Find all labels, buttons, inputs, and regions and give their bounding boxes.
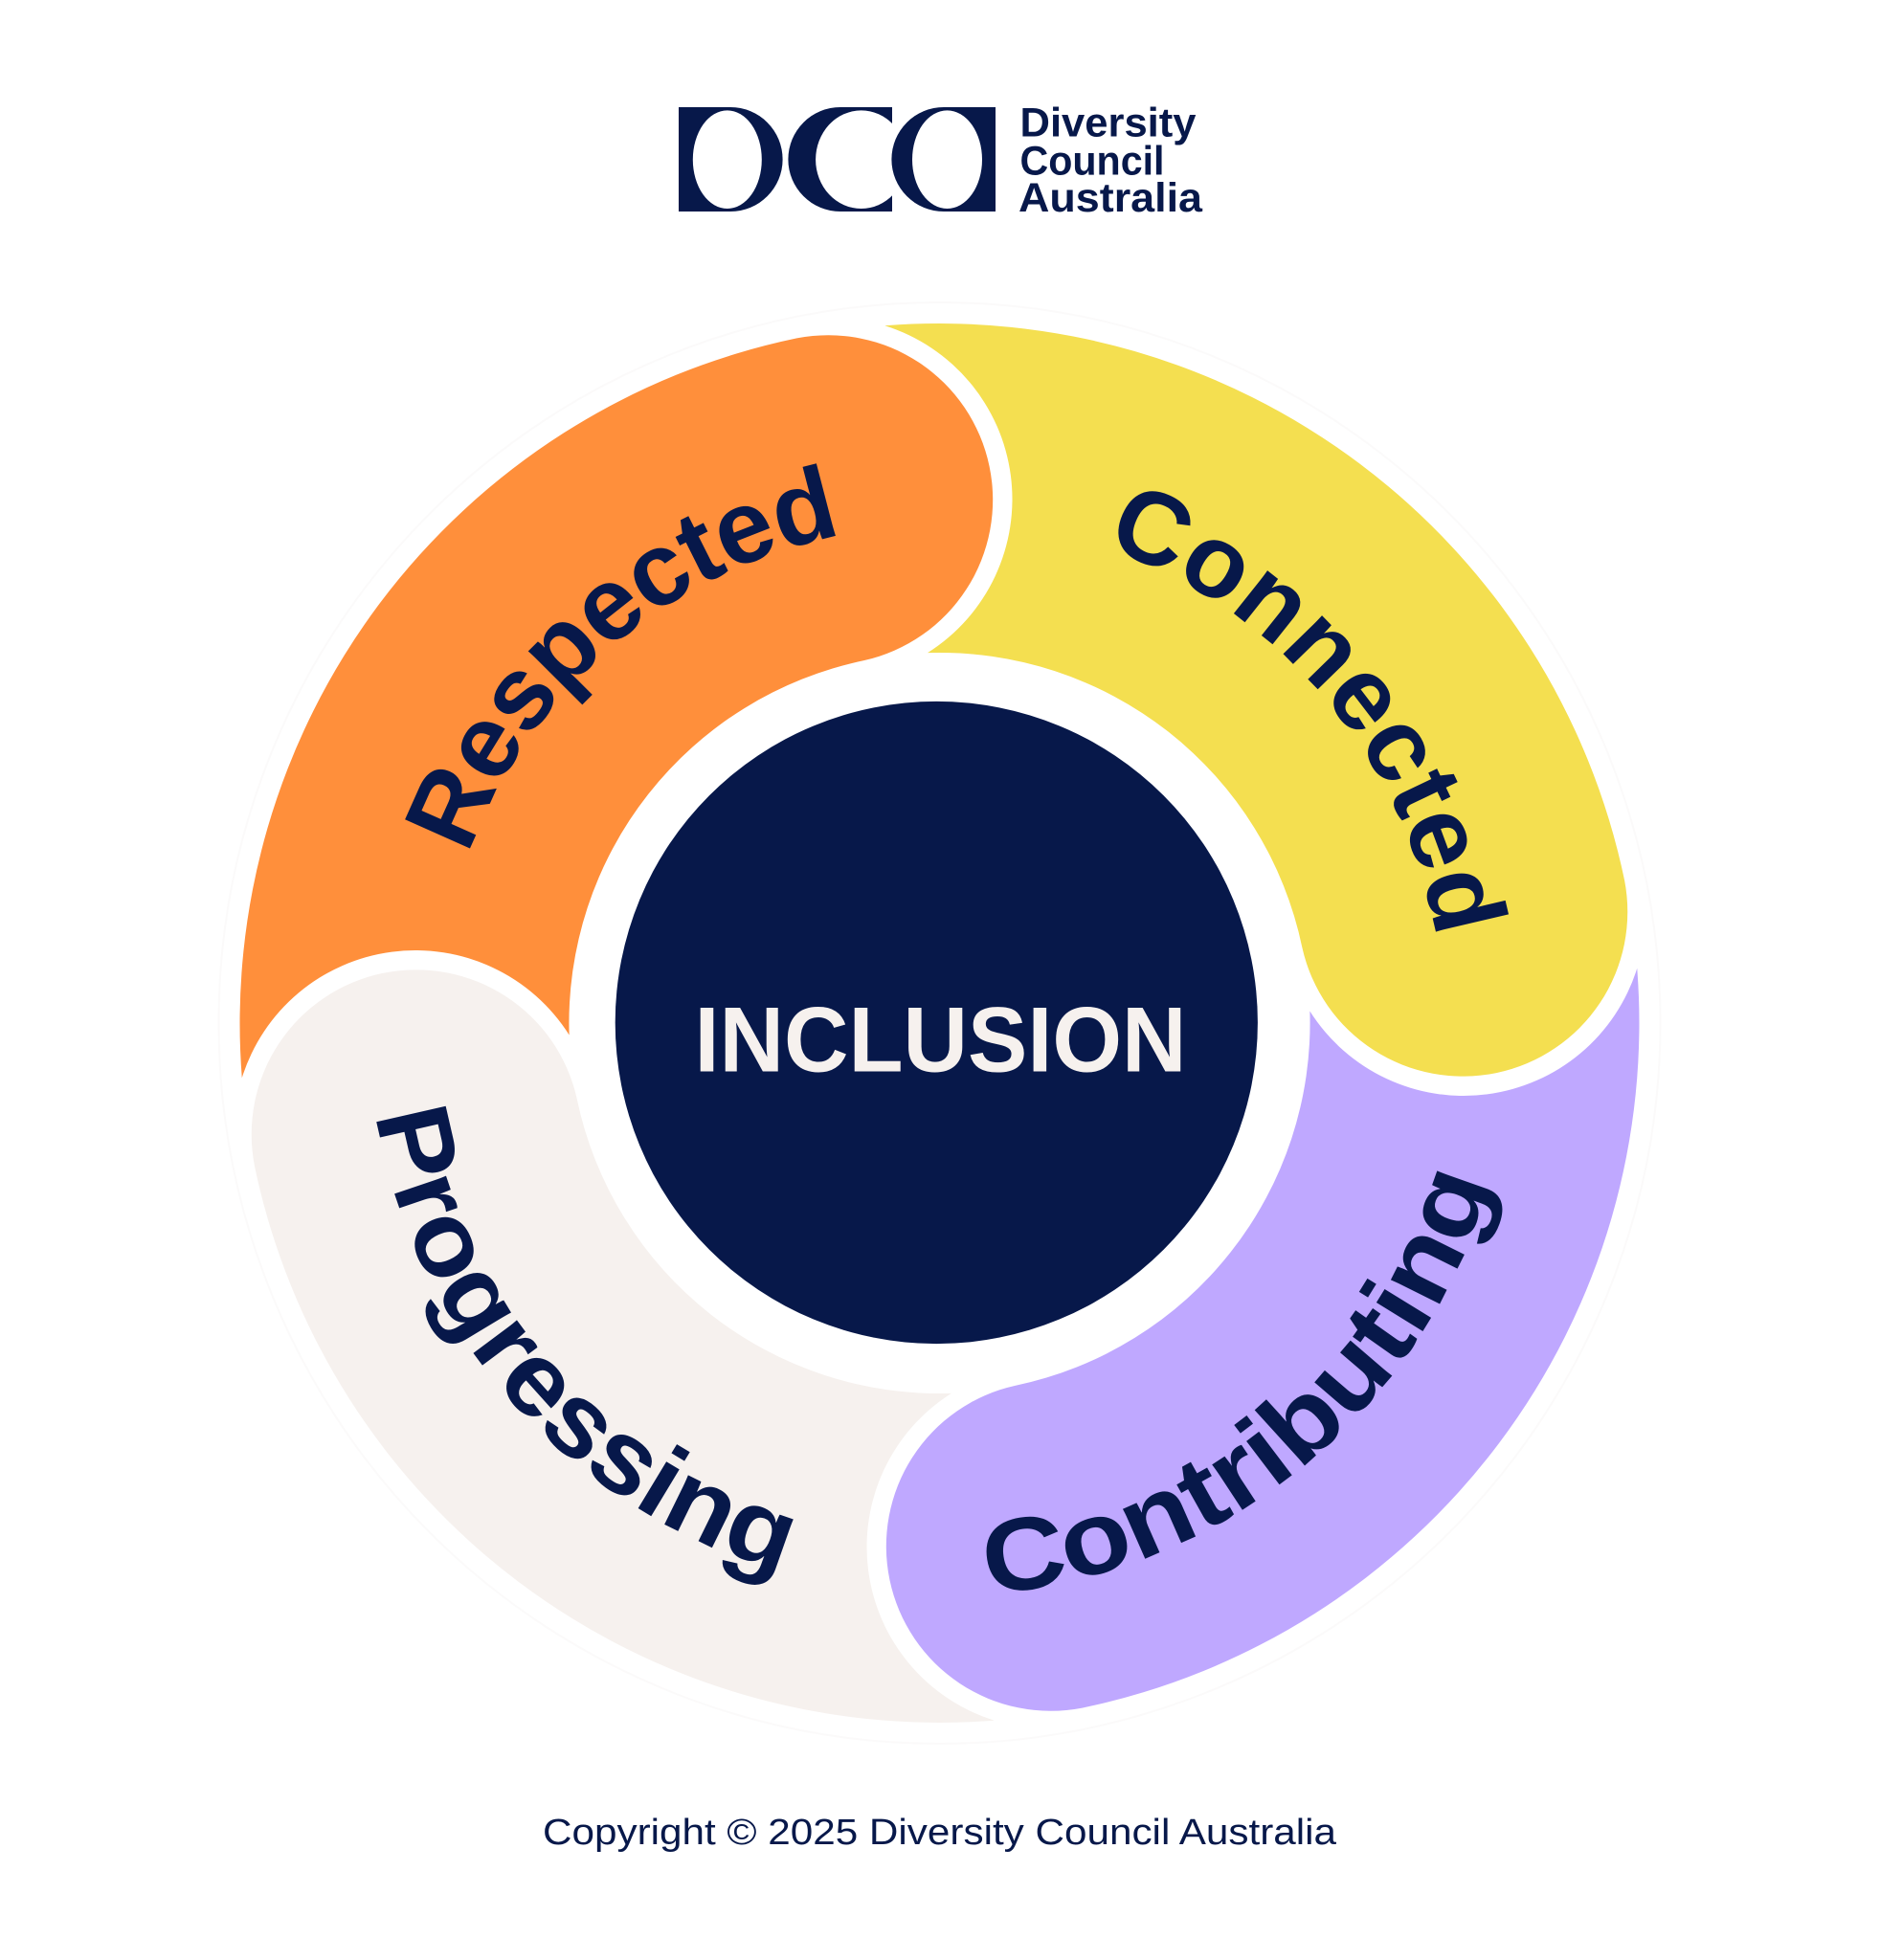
panel: Progressing segment	[252, 969, 995, 1723]
copyright line: Copyright © 2025 Diversity Council Australia	[543, 1813, 1337, 1853]
centre circle: Inclusion	[615, 702, 1258, 1344]
label: Contributing: Contributing	[986, 1170, 1503, 1591]
logo: Diversity Council Australia	[679, 100, 1203, 221]
panel: Respected segment	[240, 335, 993, 1078]
faint outer ring	[218, 302, 1660, 1744]
logo wordmark: Diversity	[1020, 100, 1197, 146]
panel: Connected segment	[884, 323, 1627, 1077]
label: Connected: Connected	[1118, 491, 1509, 932]
logo wordmark: Australia	[1018, 175, 1203, 221]
label: Progressing: Progressing	[376, 1106, 794, 1585]
logo wordmark	[1018, 100, 1203, 221]
logo wordmark: Council	[1020, 138, 1164, 184]
centre label: INCLUSION	[695, 987, 1187, 1091]
panel: Contributing segment	[886, 969, 1639, 1711]
logo mark	[679, 107, 996, 212]
label: Respected: Respected	[405, 463, 836, 848]
